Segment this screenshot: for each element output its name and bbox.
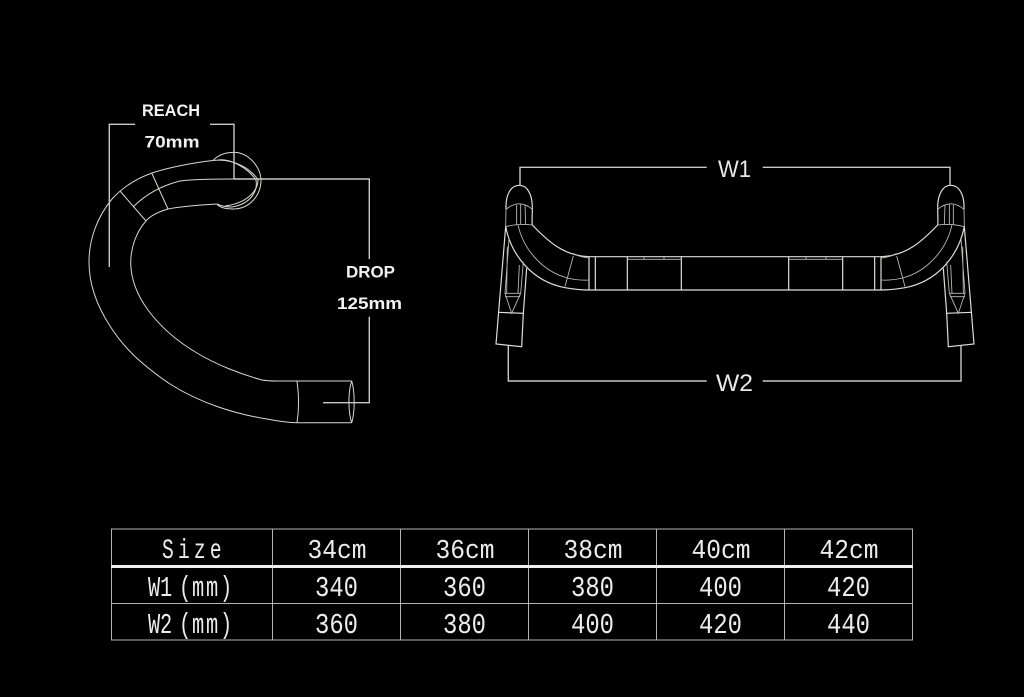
W1 row: 360 (443, 572, 486, 605)
header row: 36cm (436, 537, 494, 567)
W1 row: 400 (699, 572, 742, 605)
reach value: 70mm (144, 134, 200, 152)
drop dimension (234, 179, 402, 403)
W1 row: 340 (315, 572, 358, 605)
W2 row (148, 609, 870, 642)
W2 row: 360 (315, 609, 358, 642)
header row: 40cm (692, 537, 750, 567)
header row: 34cm (308, 537, 366, 567)
reach label: REACH (142, 102, 200, 120)
bar outer contour (89, 160, 352, 423)
header row: Size (162, 536, 226, 567)
size table (111, 529, 913, 642)
header row (162, 536, 878, 567)
header row: 42cm (820, 537, 878, 567)
drop bracket (234, 179, 369, 403)
W1 label: W1 (718, 156, 751, 183)
left half of bar (496, 185, 735, 347)
W1 row: W1(mm) (148, 572, 232, 605)
W2 row: 420 (699, 609, 742, 642)
W1 row: 420 (827, 572, 870, 605)
W1 row (148, 572, 870, 605)
W2 dimension (508, 346, 961, 397)
W2 row: 380 (443, 609, 486, 642)
drop label: DROP (346, 264, 395, 282)
table grid (112, 529, 912, 640)
side view handlebar drawing (89, 152, 354, 423)
right half of bar (735, 185, 974, 347)
W1 dimension (520, 156, 950, 185)
bar inner contour (131, 204, 352, 381)
reach bracket (109, 124, 234, 267)
W1 bracket (520, 167, 950, 185)
W2 row: 440 (827, 609, 870, 642)
bar end (297, 381, 354, 423)
section lines (120, 173, 168, 221)
clamp ellipses (213, 152, 261, 209)
W1 row: 380 (571, 572, 614, 605)
front view handlebar drawing (496, 185, 974, 347)
drop value: 125mm (337, 295, 402, 313)
header row: 38cm (564, 537, 622, 567)
W2 row: W2(mm) (148, 609, 232, 642)
reach dimension (109, 102, 234, 267)
W2 label: W2 (716, 370, 753, 397)
bar centre line (133, 179, 234, 207)
W2 bracket (508, 346, 961, 381)
header rule (111, 565, 913, 568)
W2 row: 400 (571, 609, 614, 642)
